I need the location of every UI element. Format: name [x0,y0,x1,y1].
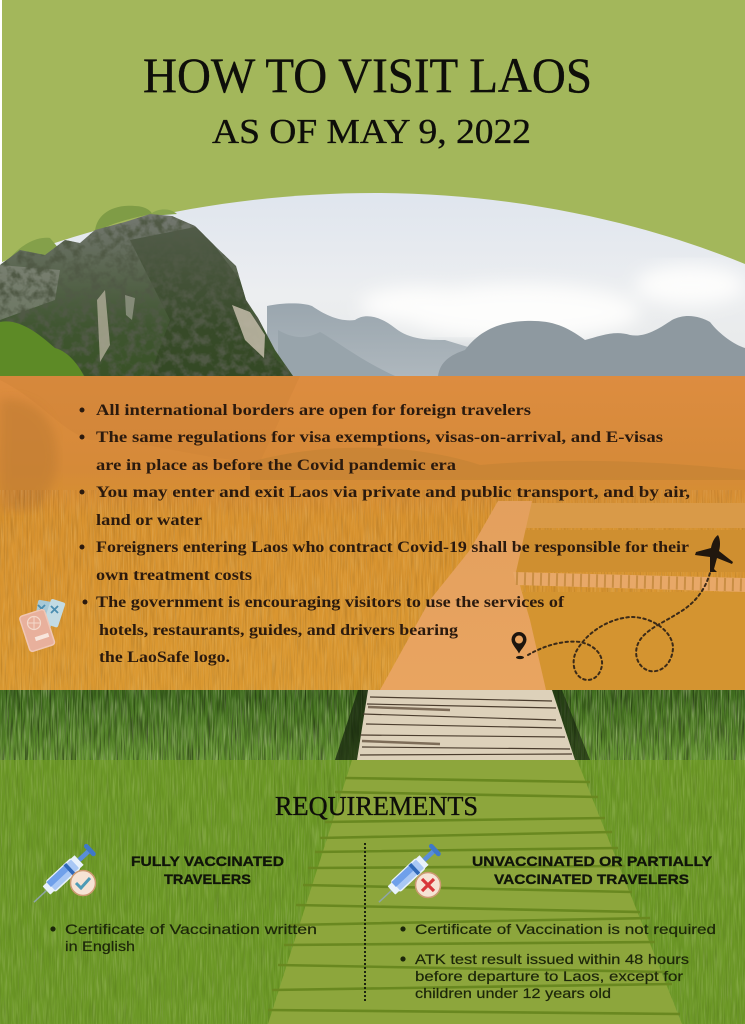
mountain with green-tinted peaks [0,205,300,380]
heading: requirements: REQUIREMENTS [275,791,478,821]
bullet text: ATK test result issued within 48 hours [415,951,689,967]
icon: syringe with cross badge [374,843,442,908]
photo: sky and mountains [0,190,745,380]
bullet text [50,921,317,954]
information bullet list: You may enter and exit Laos via private and public transport, and by air, [96,484,690,501]
title [143,47,592,151]
dotted flight path [528,573,710,680]
icon: passport and tickets [19,598,66,652]
wooden path in orange band [380,501,546,690]
information bullet list: the LaoSafe logo. [99,649,230,666]
information bullet list: The same regulations for visa exemptions, visas-on-arrival, and E-visas [96,429,663,446]
heading: unvaccinated [472,853,713,887]
information bullet list: are in place as before the Covid pandemic era [96,457,456,474]
photo band: grass and boardwalk [0,690,745,760]
icon: airplane [695,535,733,572]
heading: unvaccinated: UNVACCINATED OR PARTIALLY [472,853,713,869]
requirements panel background [0,760,745,1024]
column: fully vaccinated [29,843,317,954]
heading: fully vaccinated: FULLY VACCINATED [131,853,284,869]
bullet text: Certificate of Vaccination is not required [415,921,716,937]
column: unvaccinated [374,843,716,1001]
icon: syringe with check badge [29,843,97,908]
right field bands [515,503,745,690]
title: AS OF MAY 9, 2022 [212,112,531,151]
side boardwalk strip [513,572,745,592]
information bullet list [80,402,690,666]
bullet text: Certificate of Vaccination written [65,921,317,937]
information bullet list: The government is encouraging visitors to use the services of [96,594,565,611]
bullet text: before departure to Laos, except for [415,968,683,984]
background: top green panel [2,0,745,270]
bullet text: in English [65,938,135,954]
information bullet list: land or water [96,512,202,529]
information bullet list: All international borders are open for foreign travelers [96,402,531,419]
boardwalk planks [357,690,575,760]
information bullet list: own treatment costs [96,567,252,584]
heading: fully vaccinated: TRAVELERS [164,871,251,887]
orange information panel background [0,376,745,690]
divider [364,843,366,1003]
information bullet list: hotels, restaurants, guides, and drivers bearing [99,622,458,639]
icon: location pin [512,632,526,659]
bullet text [400,921,716,1001]
heading: unvaccinated: VACCINATED TRAVELERS [494,871,689,887]
bullet text: children under 12 years old [415,985,611,1001]
title: HOW TO VISIT LAOS [143,47,592,103]
heading: fully vaccinated [131,853,284,887]
information bullet list: Foreigners entering Laos who contract Covid-19 shall be responsible for their [96,539,689,556]
